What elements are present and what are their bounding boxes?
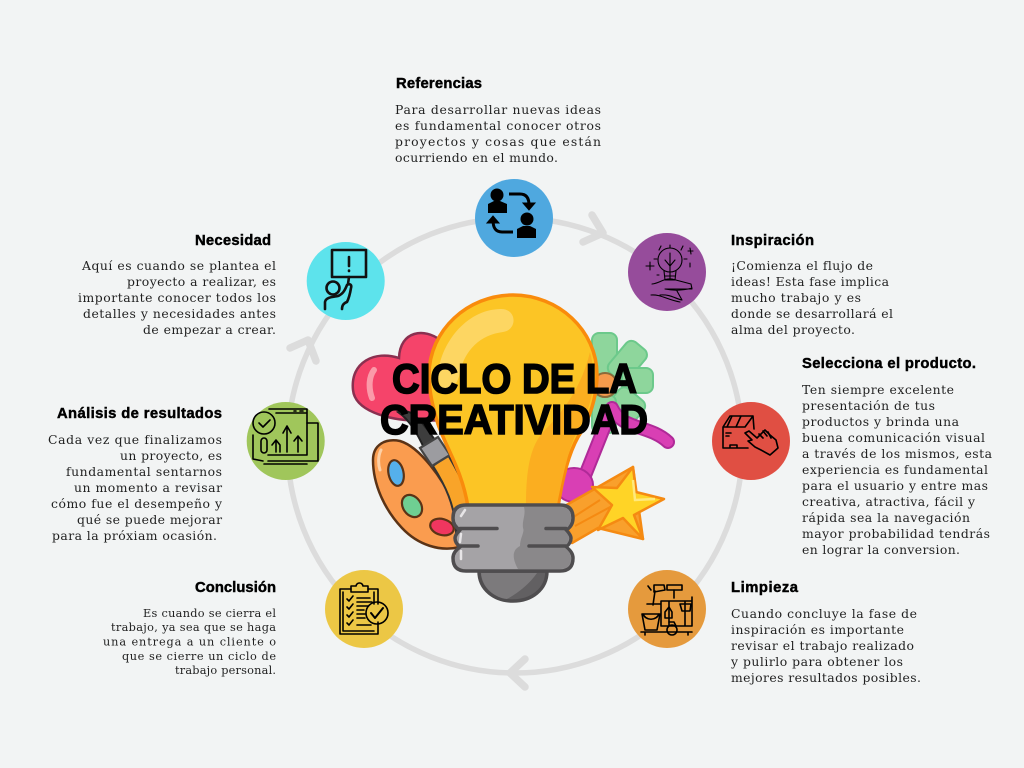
body: referencias: Para desarrollar nuevas ideas xyxy=(395,102,601,117)
arrow: bottom xyxy=(510,659,525,687)
body: necesidad: importante conocer todos los xyxy=(78,290,276,305)
body: analisis de resultados: fundamental sentarnos xyxy=(66,464,222,479)
icon: conclusion, yellow circle with clipboard checklist xyxy=(325,570,403,648)
body: analisis de resultados xyxy=(48,432,222,543)
body: analisis de resultados: para la próxiam ocasión. xyxy=(52,528,217,543)
body: selecciona el producto: rápida sea la navegación xyxy=(802,510,970,525)
body: conclusion: una entrega a un cliente o xyxy=(103,636,276,648)
icon: selecciona, red circle with box and pointing hand xyxy=(712,402,790,480)
body: selecciona el producto: mayor probabilidad tendrás xyxy=(802,526,990,541)
body: necesidad: Aquí es cuando se plantea el xyxy=(81,258,276,273)
icon: inspiracion, purple circle with bulb on hand xyxy=(628,233,706,311)
body: conclusion: Es cuando se cierra el xyxy=(143,607,276,620)
body: analisis de resultados: Cada vez que finalizamos xyxy=(48,432,222,447)
icon: referencias, blue circle with exchanging people xyxy=(475,179,553,257)
body: selecciona el producto: creativa, atractiva, fácil y xyxy=(802,494,975,509)
body: analisis de resultados: cómo fue el desempeño y xyxy=(51,496,222,511)
heading: selecciona el producto: Selecciona el producto. xyxy=(802,356,976,372)
body: inspiracion: mucho trabajo y es xyxy=(731,290,861,305)
body: inspiracion: alma del proyecto. xyxy=(731,322,855,337)
body: limpieza: revisar el trabajo realizado xyxy=(731,638,914,653)
body: selecciona el producto: presentación de tus xyxy=(802,398,935,413)
icon: analisis, green circle with dashboard and magnifier xyxy=(247,402,325,480)
body: referencias xyxy=(395,102,601,165)
body: limpieza: y pulirlo para obtener los xyxy=(730,654,903,669)
text block: necesidad xyxy=(78,233,276,337)
flower xyxy=(592,333,653,433)
body: referencias: es fundamental conocer otros xyxy=(395,118,601,133)
body: limpieza: mejores resultados posibles. xyxy=(731,670,921,685)
text block: inspiracion xyxy=(731,233,893,337)
body: inspiracion: ideas! Esta fase implica xyxy=(731,274,890,289)
arrow: top right xyxy=(583,215,603,242)
body: referencias: proyectos y cosas que están xyxy=(395,134,601,149)
body: limpieza xyxy=(730,606,921,685)
icon: limpieza, orange circle with cleaning cart xyxy=(628,570,706,648)
heading: referencias: Referencias xyxy=(396,76,482,92)
title xyxy=(380,355,648,443)
body: inspiracion: ¡Comienza el flujo de xyxy=(731,258,873,273)
icon: necesidad, cyan circle with person holding sign xyxy=(307,242,385,320)
body: conclusion: trabajo, ya sea que se haga xyxy=(111,621,276,634)
text block: analisis de resultados xyxy=(48,406,222,543)
bulb socket xyxy=(453,505,573,601)
body: necesidad: proyecto a realizar, es xyxy=(127,274,276,289)
body: limpieza: inspiración es importante xyxy=(731,622,904,637)
music note xyxy=(555,408,668,502)
body: necesidad: detalles y necesidades antes xyxy=(83,306,276,321)
body: necesidad: de empezar a crear. xyxy=(143,322,276,337)
body: conclusion: que se cierre un ciclo de xyxy=(122,650,276,663)
bulb glass xyxy=(429,295,597,507)
heading: necesidad: Necesidad xyxy=(195,233,271,249)
shooting star xyxy=(563,467,664,543)
body: referencias: ocurriendo en el mundo. xyxy=(395,150,558,165)
body: analisis de resultados: un momento a revisar xyxy=(74,480,222,495)
body: limpieza: Cuando concluye la fase de xyxy=(731,606,917,621)
body: selecciona el producto xyxy=(802,382,993,557)
heart xyxy=(353,333,445,421)
heading: conclusion: Conclusión xyxy=(195,580,276,596)
paint palette xyxy=(373,440,460,549)
title: CREATIVIDAD xyxy=(380,396,648,443)
arrow: left xyxy=(290,340,316,361)
heading: analisis de resultados: Análisis de resultados xyxy=(57,406,222,422)
body: necesidad xyxy=(78,258,276,337)
body: selecciona el producto: a través de los mismos, esta xyxy=(802,446,993,461)
paint brush xyxy=(398,411,472,532)
body: selecciona el producto: en lograr la conversion. xyxy=(802,542,960,557)
body: selecciona el producto: buena comunicación visual xyxy=(802,430,985,445)
heading: limpieza: Limpieza xyxy=(731,580,799,596)
text block: conclusion xyxy=(103,580,276,677)
body: analisis de resultados: qué se puede mejorar xyxy=(77,512,222,527)
body: inspiracion xyxy=(731,258,893,337)
central illustration: light bulb with creative objects xyxy=(353,295,668,601)
body: selecciona el producto: para el usuario y entre mas xyxy=(802,478,988,493)
body: conclusion: trabajo personal. xyxy=(175,664,276,677)
heading: inspiracion: Inspiración xyxy=(731,233,814,249)
body: selecciona el producto: experiencia es fundamental xyxy=(802,462,988,477)
text block: selecciona el producto xyxy=(802,356,993,557)
text block: limpieza xyxy=(730,580,921,685)
body: conclusion xyxy=(103,607,276,677)
body: selecciona el producto: Ten siempre excelente xyxy=(802,382,954,397)
title: CICLO DE LA xyxy=(392,355,637,402)
text block: referencias xyxy=(395,76,601,165)
body: selecciona el producto: productos y brinda una xyxy=(802,414,960,429)
body: inspiracion: donde se desarrollará el xyxy=(731,306,893,321)
body: analisis de resultados: un proyecto, es xyxy=(120,448,222,463)
